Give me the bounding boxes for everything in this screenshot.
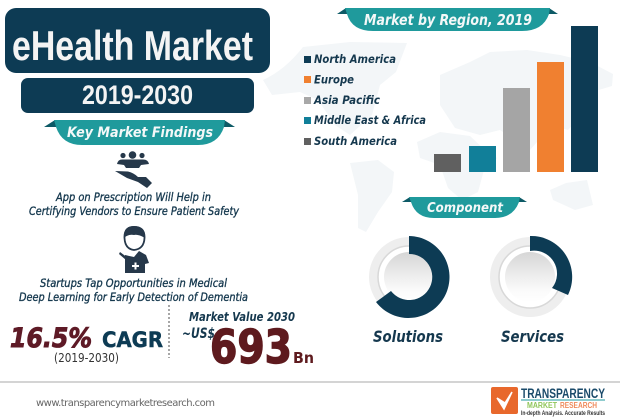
stat: CAGR	[10, 323, 163, 365]
ribbon heading: key market findings: Key Market Findings	[67, 125, 213, 141]
title box: eHealth Market	[12, 22, 253, 69]
ribbon heading: market by region: Market by Region, 2019	[364, 11, 532, 29]
logo: transparency market research: In-depth Analysis. Accurate Results	[521, 411, 606, 417]
title box	[5, 8, 270, 73]
stat: CAGR: (2019-2030)	[54, 351, 119, 365]
ribbon heading: component: Component	[427, 201, 504, 216]
icon: group of people on a hand	[115, 151, 152, 188]
text: app on prescription finding: Certifying Vendors to Ensure Patient Safety	[29, 204, 239, 218]
website url: www.transparencymarketresearch.com	[36, 398, 215, 409]
logo: transparency market research: MARKET	[527, 401, 557, 410]
ribbon heading: market by region	[337, 8, 558, 31]
logo: transparency market research	[491, 386, 606, 417]
year box: 2019-2030	[82, 80, 193, 110]
donut: solutions	[369, 236, 449, 346]
stat: CAGR: 16.5%	[10, 323, 92, 354]
logo: transparency market research: RESEARCH	[560, 401, 597, 410]
legend	[304, 52, 426, 148]
text: startups finding: Deep Learning for Early Detection of Dementia	[19, 290, 248, 304]
stat: market value 2030: Bn	[293, 349, 314, 367]
legend: South America	[314, 134, 397, 148]
stat: CAGR: CAGR	[102, 328, 163, 352]
donut: services: Services	[501, 327, 564, 346]
legend: Asia Pacific	[313, 93, 380, 107]
donut: solutions: Solutions	[373, 327, 443, 346]
legend: Middle East & Africa	[314, 113, 426, 127]
world map background	[263, 42, 613, 232]
ribbon heading: component	[402, 197, 527, 218]
text: startups finding: Startups Tap Opportunities in Medical	[40, 276, 228, 290]
donut: services	[490, 236, 572, 346]
legend: Europe	[314, 72, 354, 86]
text: startups finding	[19, 276, 248, 304]
bar chart	[434, 26, 598, 172]
text: app on prescription finding	[29, 190, 239, 218]
stat: market value 2030: ~US$	[182, 326, 215, 342]
legend: North America	[314, 52, 396, 66]
year box	[21, 78, 254, 113]
stat: market value 2030: 693	[210, 320, 292, 374]
stat: market value 2030: Market Value 2030	[189, 309, 295, 324]
text: app on prescription finding: App on Prescription Will Help in	[55, 190, 211, 204]
icon: doctor	[119, 226, 149, 273]
stat: market value 2030	[182, 309, 314, 374]
ribbon heading: key market findings	[44, 120, 235, 145]
